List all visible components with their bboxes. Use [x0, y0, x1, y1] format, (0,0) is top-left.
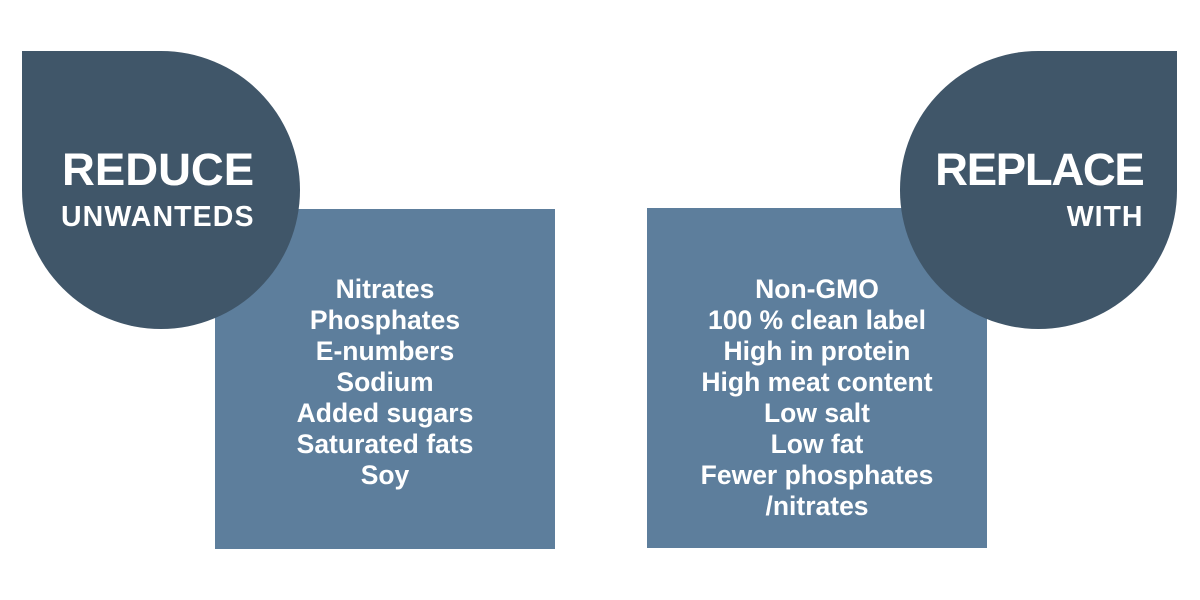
text block: unwanted ingredients: Saturated fats [297, 429, 473, 459]
heading: replace: REPLACE [935, 144, 1144, 195]
panel: replace list box [647, 208, 987, 548]
text block: unwanted ingredients: Nitrates [336, 274, 434, 304]
subheading: with: WITH [1067, 201, 1144, 233]
text block: unwanted ingredients: Sodium [336, 367, 434, 397]
heading: reduce: REDUCE [62, 144, 254, 195]
text block: unwanted ingredients [297, 274, 473, 490]
text block: replacement attributes: 100 % clean label [708, 305, 926, 335]
text block: replacement attributes [701, 274, 933, 521]
text block: unwanted ingredients: Soy [361, 460, 409, 490]
text block: replacement attributes: Non-GMO [755, 274, 879, 304]
text block: replacement attributes: High in protein [724, 336, 910, 366]
text block: unwanted ingredients: E-numbers [316, 336, 454, 366]
text block: replacement attributes: Low salt [764, 398, 870, 428]
text block: replacement attributes: /nitrates [765, 491, 869, 521]
text block: unwanted ingredients: Added sugars [297, 398, 473, 428]
badge: replace with [900, 51, 1177, 329]
text block: replacement attributes: Low fat [771, 429, 863, 459]
panel: reduce list box [215, 209, 555, 549]
text block: unwanted ingredients: Phosphates [310, 305, 460, 335]
badge: reduce unwanteds [22, 51, 300, 329]
subheading: unwanteds: UNWANTEDS [61, 201, 255, 233]
text block: replacement attributes: Fewer phosphates [701, 460, 933, 490]
text block: replacement attributes: High meat content [701, 367, 933, 397]
